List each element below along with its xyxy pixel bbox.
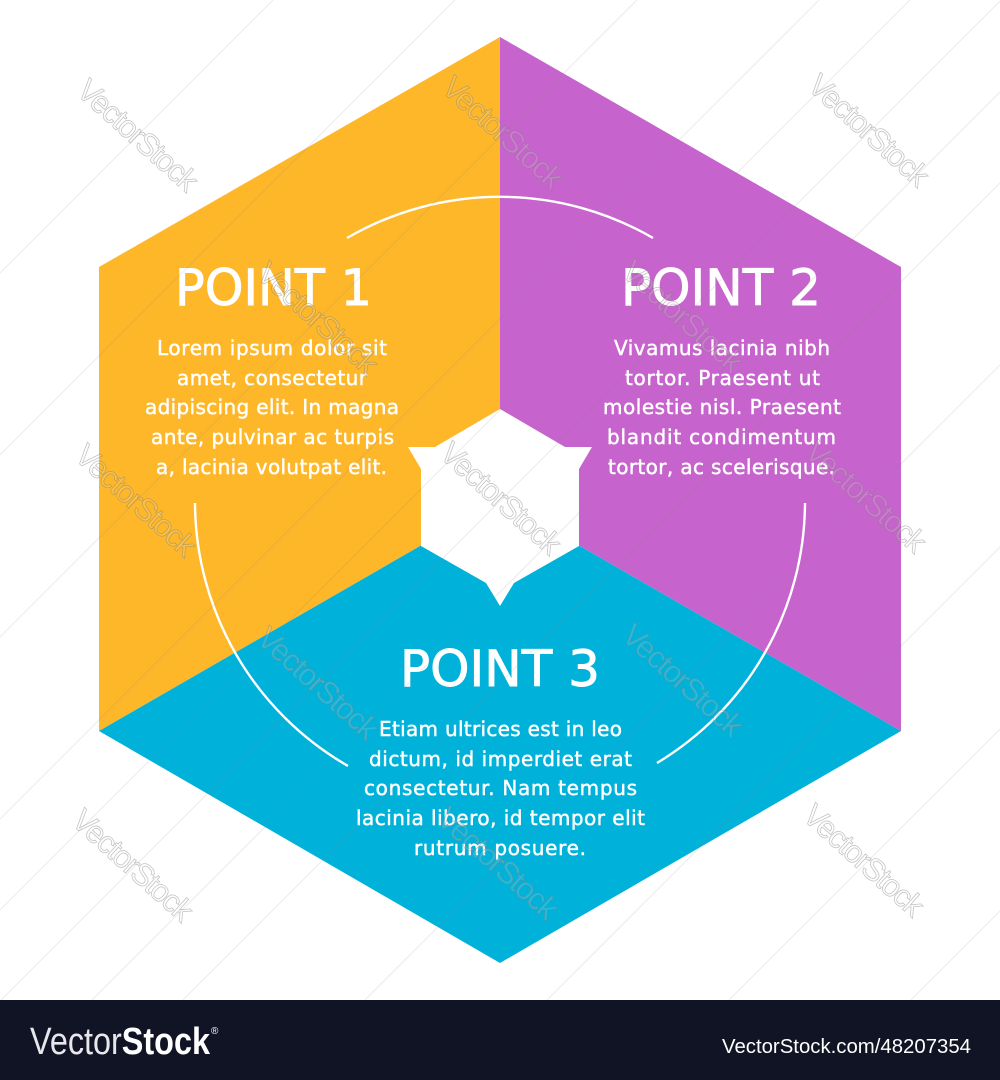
- text block: point 3 body: lacinia libero, id tempor elit: [356, 806, 645, 830]
- panel: point 2 purple segment: [500, 37, 901, 731]
- watermark diagonal lines and repeated stock marks: VectorStock: [65, 802, 201, 929]
- watermark diagonal lines and repeated stock marks: VectorStock: [798, 433, 934, 560]
- text block: point 3 body: [356, 717, 645, 860]
- footer image id: VectorStock.com/48207354: [722, 1036, 971, 1058]
- text block: point 3 body: consectetur. Nam tempus: [364, 776, 637, 800]
- watermark diagonal lines and repeated stock marks: VectorStock: [615, 253, 751, 380]
- text block: point 3 body: Etiam ultrices est in leo: [379, 717, 622, 741]
- centre white hexagon with three spikes: [408, 409, 592, 606]
- heading: point 2: POINT 2: [621, 259, 821, 317]
- text block: point 2 body: Vivamus lacinia nibh: [614, 336, 830, 360]
- watermark diagonal lines and repeated stock marks: VectorStock: [250, 620, 386, 747]
- watermark diagonal lines and repeated stock marks: VectorStock: [433, 435, 569, 562]
- text block: point 1 body: [145, 336, 399, 479]
- text block: point 2 body: tortor. Praesent ut: [625, 366, 820, 390]
- watermark diagonal lines and repeated stock marks: VectorStock: [70, 72, 206, 199]
- text block: point 1 body: ante, pulvinar ac turpis: [151, 425, 394, 449]
- watermark diagonal lines and repeated stock marks: VectorStock: [796, 797, 932, 924]
- footer bar: [0, 1000, 1000, 1080]
- watermark diagonal lines and repeated stock marks: VectorStock: [430, 800, 566, 927]
- watermark diagonal lines and repeated stock marks: VectorStock: [68, 437, 204, 564]
- text block: point 1 body: Lorem ipsum dolor sit: [157, 336, 387, 360]
- text block: point 2 body: tortor, ac scelerisque.: [608, 455, 835, 479]
- circular arc segments: [195, 197, 805, 766]
- watermark diagonal lines and repeated stock marks: VectorStock: [250, 255, 386, 382]
- text block: point 1 body: a, lacinia volutpat elit.: [156, 455, 387, 479]
- watermark diagonal lines and repeated stock marks: VectorStock: [615, 617, 751, 744]
- text block: point 1 body: adipiscing elit. In magna: [145, 395, 399, 419]
- panel: point 1 orange segment: [99, 37, 500, 731]
- text block: point 2 body: molestie nisl. Praesent: [603, 395, 841, 419]
- text block: point 1 body: amet, consectetur: [177, 366, 368, 390]
- footer registered mark: ®: [211, 1026, 219, 1037]
- watermark diagonal lines and repeated stock marks: VectorStock: [801, 67, 937, 194]
- text block: point 3 body: rutrum posuere.: [414, 836, 586, 860]
- text block: point 2 body: blandit condimentum: [607, 425, 836, 449]
- text block: point 2 body: [603, 336, 841, 479]
- footer logo: VectorStock: [30, 1021, 211, 1063]
- heading: point 1: POINT 1: [175, 259, 372, 317]
- text block: point 3 body: dictum, id imperdiet erat: [369, 747, 632, 771]
- heading: point 3: POINT 3: [400, 640, 600, 698]
- watermark diagonal lines and repeated stock marks: VectorStock: [435, 69, 571, 196]
